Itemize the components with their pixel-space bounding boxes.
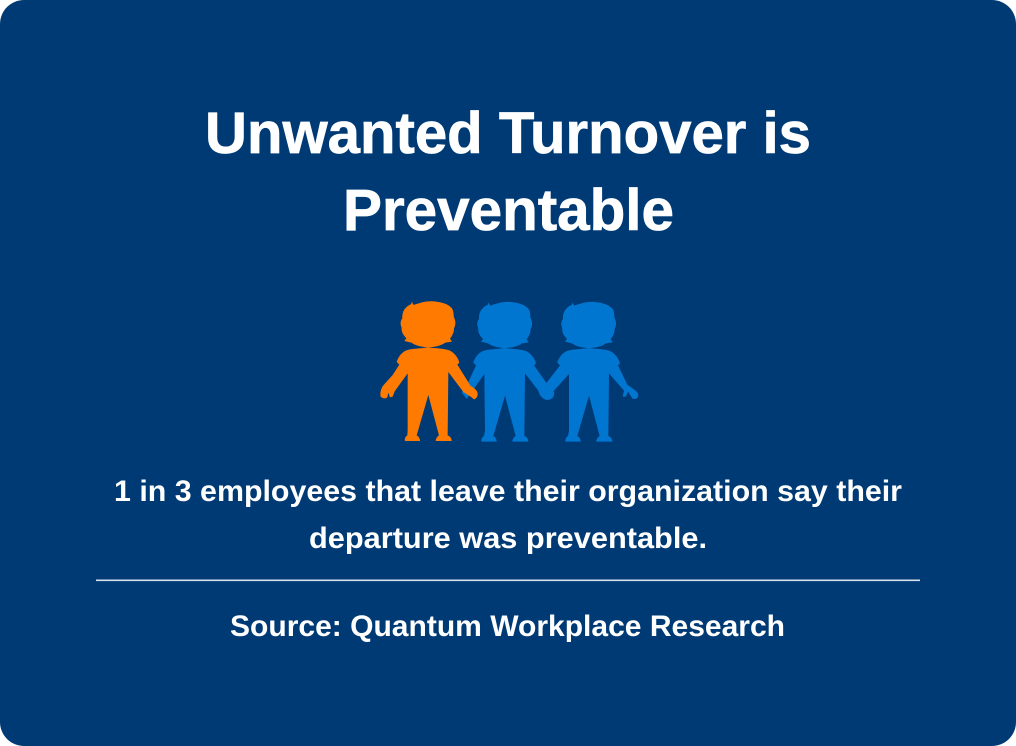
title: Preventable (343, 178, 674, 243)
text block: key statistic: departure was preventable. (309, 522, 707, 555)
icon: orange person, left (380, 301, 478, 441)
source line: Source: Quantum Workplace Research (230, 610, 785, 643)
title: Unwanted Turnover is (205, 101, 811, 166)
icon: blue person, right (545, 302, 638, 442)
icon: three people holding hands, one highlighted (380, 301, 638, 442)
title (205, 101, 811, 243)
text block: key statistic (114, 475, 902, 555)
text block: key statistic: 1 in 3 employees that leave their organization say their (114, 475, 902, 508)
icon: blue person, middle (462, 302, 554, 442)
